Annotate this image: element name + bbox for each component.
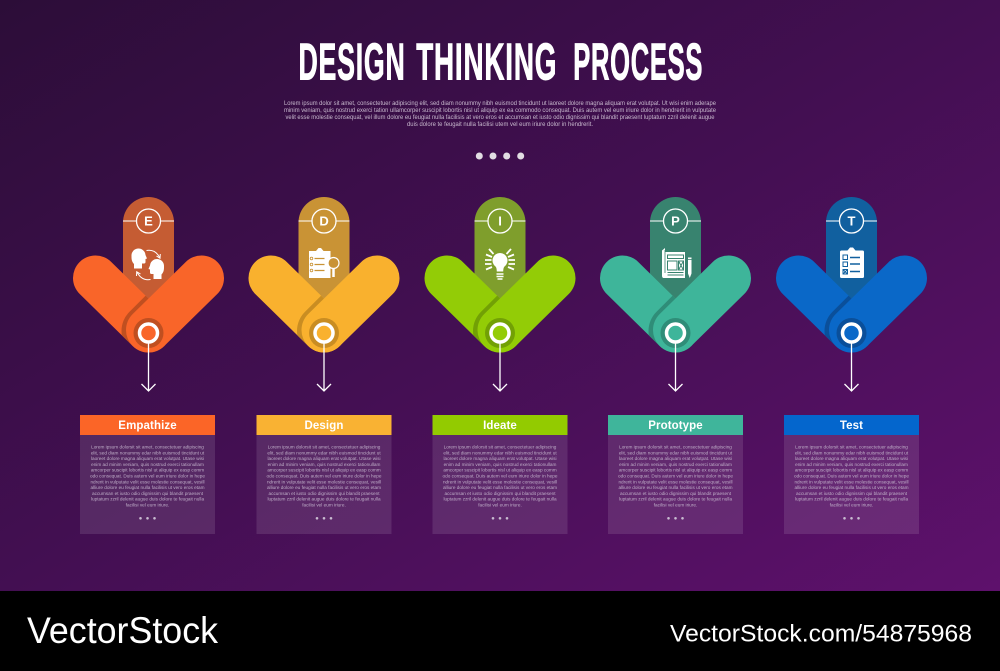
four dots (476, 152, 524, 160)
card: Test: alliure dolore eu feugiat nulla facilisis ut vero eros etam (794, 485, 909, 490)
step 5: Test (784, 197, 919, 534)
card: Prototype: accumsan et iusto odio dignissim qui blandit praesent (620, 491, 732, 496)
chevron arms (798, 278, 904, 331)
text: PROCESS (573, 33, 703, 91)
card: Empathize: enim ad minim veniam, quis nostrud exerci tationullam (91, 462, 204, 467)
card: Prototype: facilisi vel eum iriure. (654, 502, 697, 508)
title: THINKING (416, 33, 557, 91)
card: Empathize: luptatum zzril delenit augue duis dolore te feugait nulla (91, 497, 204, 502)
node ring (660, 318, 690, 348)
tab with letter T (826, 197, 877, 312)
step 3: Ideate (432, 197, 568, 534)
chevron arms (447, 278, 553, 331)
node ring (836, 318, 866, 348)
card: Design: accumsan et iusto odio dignissim qui blandit praesent (268, 491, 380, 496)
card: Ideate: Lorem ipsum dolorsit sit amet, consectetuer adipiscing (444, 444, 557, 450)
card: Prototype: elit, sed diam nonummy edar nibh euismod tincidunt ut (619, 450, 733, 455)
card: Ideate: Ideate (483, 420, 517, 432)
card: Test: amcorper suscipit lobortis nisl ut aliquip ex easp comm (795, 468, 908, 473)
tab with letter P (650, 197, 701, 312)
icon: heads with cycle arrows (131, 248, 164, 280)
intro text block: minim veniam, quis nostrud exerci tation ullamcorper suscipit lobortis nisl ut aliquip ex ea commodo consequat. Duis autem vel eum iriure dolor in hendrerit in vulputate (284, 108, 717, 114)
arrow (142, 343, 156, 391)
tab with letter P: P (671, 214, 680, 229)
intro text block: duis dolore te feugait nulla facilisi utem vel eum iriure dolor in hendrerit. (407, 122, 593, 128)
step 2: Design (256, 197, 392, 534)
icon: blueprint and pencil (662, 248, 692, 278)
card: Prototype: odo consequat. Duis autem vel eum iriure dolor in hepe (618, 474, 733, 478)
card: Prototype: alliure dolore eu feugiat nulla facilisis ut vero eros etam (618, 485, 733, 490)
card: Test: enim ad minim veniam, quis nostrud exerci tationullam (795, 462, 908, 467)
tab with letter E (123, 197, 174, 312)
chevron arms (622, 278, 728, 331)
node ring (485, 318, 515, 348)
arrow (493, 343, 507, 391)
card: Prototype: amcorper suscipit lobortis nisl ut aliquip ex easp comm (619, 468, 732, 473)
tab with letter D: D (319, 214, 329, 229)
card: Prototype: Lorem ipsum dolorsit sit amet, consectetuer adipiscing (619, 444, 732, 450)
card: Design (256, 415, 392, 534)
card: Test: accumsan et iusto odio dignissim qui blandit praesent (796, 491, 908, 496)
card: Prototype (608, 415, 743, 534)
card: Ideate: odo consequat. Duis autem vel eum iriure dolor in hepe (443, 474, 558, 478)
card: Ideate: amcorper suscipit lobortis nisl ut aliquip ex easp comm (443, 468, 557, 473)
card: Ideate: accumsan et iusto odio dignissim qui blandit praesent (444, 491, 556, 496)
card: Ideate: ndrerit in vulputate velit esse molestie consequat, vesill (443, 479, 557, 484)
icon: checklist clipboard (840, 248, 864, 278)
card: Empathize (80, 415, 215, 534)
card: Prototype: laoreet dolore magna aliquam erat volutpat. Utase wisi (619, 456, 732, 461)
tab with letter I (474, 197, 526, 312)
card: Design: odo consequat. Duis autem vel eum iriure dolor in hepe (267, 474, 382, 478)
step 4: Prototype (608, 197, 743, 534)
footer logo: VectorStock (27, 610, 218, 651)
card: Design: Design (305, 420, 343, 432)
card: Ideate: luptatum zzril delenit augue duis dolore te feugait nulla (443, 497, 557, 502)
card: Design: ndrerit in vulputate velit esse molestie consequat, vesill (267, 479, 381, 484)
card: Empathize: odo consequat. Duis autem vel eum iriure dolor in hepe (90, 474, 205, 478)
icon: light bulb (485, 249, 515, 279)
card: Test: laoreet dolore magna aliquam erat volutpat. Utase wisi (795, 456, 908, 461)
card: Prototype: enim ad minim veniam, quis nostrud exerci tationullam (619, 462, 732, 467)
card: Design: elit, sed diam nonummy edar nibh euismod tincidunt ut (267, 450, 381, 455)
card: Empathize: accumsan et iusto odio dignissim qui blandit praesent (92, 491, 204, 496)
card: Prototype: Prototype (648, 420, 703, 432)
card: Test: Lorem ipsum dolorsit sit amet, consectetuer adipiscing (795, 444, 908, 450)
card: Design: facilisi vel eum iriure. (302, 502, 346, 508)
card: Empathize: amcorper suscipit lobortis nisl ut aliquip ex easp comm (91, 468, 204, 473)
intro text block: Lorem ipsum dolor sit amet, consectetuer adipiscing elit, sed diam nonummy nibh euismod tincidunt ut laoreet dolore magna aliquam erat volutpat. Ut wisi enim aderape (284, 101, 717, 107)
tab with letter E: E (144, 214, 153, 229)
card: Empathize: facilisi vel eum iriure. (126, 502, 169, 508)
tab with letter T: T (848, 214, 856, 229)
card: Test: facilisi vel eum iriure. (830, 502, 873, 508)
footer bar (0, 591, 1000, 671)
card: Test: Test (840, 420, 863, 432)
card: Design: enim ad minim veniam, quis nostrud exerci tationullam (268, 462, 380, 467)
card: Empathize: laoreet dolore magna aliquam erat volutpat. Utase wisi (91, 456, 204, 461)
card: Ideate: facilisi vel eum iriure. (478, 502, 522, 508)
tab with letter D (298, 197, 350, 312)
intro text block (284, 101, 717, 128)
card: Test: elit, sed diam nonummy edar nibh euismod tincidunt ut (795, 450, 909, 455)
tab with letter I: I (498, 214, 502, 229)
card: Test: luptatum zzril delenit augue duis dolore te feugait nulla (795, 497, 908, 502)
step 1: Empathize (80, 197, 215, 534)
card: Design: laoreet dolore magna aliquam erat volutpat. Utase wisi (267, 456, 381, 461)
card: Ideate (432, 415, 568, 534)
card: Empathize: ndrerit in vulputate velit esse molestie consequat, vesill (90, 479, 205, 484)
title (298, 33, 703, 91)
card: Test (784, 415, 919, 534)
footer image id: VectorStock.com/54875968 (670, 620, 972, 648)
title: DESIGN (298, 33, 406, 91)
chevron arms (96, 278, 202, 331)
card: Design: luptatum zzril delenit augue duis dolore te feugait nulla (267, 497, 381, 502)
card: Ideate: laoreet dolore magna aliquam erat volutpat. Utase wisi (443, 456, 557, 461)
card: Empathize: alliure dolore eu feugiat nulla facilisis ut vero eros etam (90, 485, 205, 490)
icon: clipboard with magnifier (309, 248, 339, 278)
arrow (844, 343, 858, 391)
card: Test: odo consequat. Duis autem vel eum iriure dolor in hepe (794, 474, 909, 478)
card: Design: Lorem ipsum dolorsit sit amet, consectetuer adipiscing (268, 444, 381, 450)
card: Ideate: alliure dolore eu feugiat nulla facilisis ut vero eros etam (443, 485, 557, 490)
card: Ideate: elit, sed diam nonummy edar nibh euismod tincidunt ut (443, 450, 557, 455)
card: Ideate: enim ad minim veniam, quis nostrud exerci tationullam (444, 462, 556, 467)
card: Empathize: Lorem ipsum dolorsit sit amet, consectetuer adipiscing (91, 444, 204, 450)
chevron arms (271, 278, 377, 331)
arrow (668, 343, 682, 391)
card: Empathize: elit, sed diam nonummy edar nibh euismod tincidunt ut (91, 450, 205, 455)
intro text block: velit esse molestie consequat, vel illum dolore eu feugiat nulla facilisis at vero eros et accumsan et iusto odio dignissim qui blandit praesent luptatum zzril delenit augue (286, 115, 715, 121)
arrow (317, 343, 331, 391)
card: Test: ndrerit in vulputate velit esse molestie consequat, vesill (794, 479, 909, 484)
node ring (134, 318, 164, 348)
card: Design: alliure dolore eu feugiat nulla facilisis ut vero eros etam (267, 485, 381, 490)
card: Prototype: ndrerit in vulputate velit esse molestie consequat, vesill (618, 479, 733, 484)
card: Prototype: luptatum zzril delenit augue duis dolore te feugait nulla (619, 497, 732, 502)
node ring (309, 318, 339, 348)
card: Design: amcorper suscipit lobortis nisl ut aliquip ex easp comm (267, 468, 381, 473)
card: Empathize: Empathize (118, 420, 177, 432)
